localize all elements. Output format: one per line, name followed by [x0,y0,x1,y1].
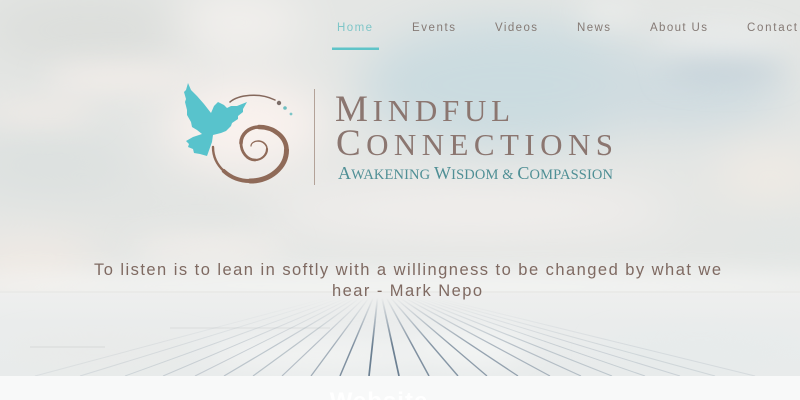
plank lines [35,301,755,376]
nav item: news: News [577,22,610,34]
wooden deck in perspective [0,284,800,376]
nav item: about us: About Us [650,22,707,34]
sky with clouds [0,0,800,298]
nav item: home, active [332,22,379,50]
nav item: home, active: Home [337,22,372,34]
icon: turquoise dove [184,83,247,156]
icon: brown spiral [213,127,286,181]
quote: hear - Mark Nepo [332,282,482,300]
logo wordmark: AWAKENING WISDOM & COMPASSION [338,163,614,183]
nav item: contact: Contact [747,22,798,34]
logo wordmark: CONNECTIONS [336,123,613,164]
quote: To listen is to lean in softly with a willingness to be changed by what we [94,261,721,279]
logo wordmark [335,89,614,183]
footer band [0,376,800,400]
nav item: events: Events [412,22,455,34]
logo [184,83,614,185]
navigation menu [332,22,798,50]
icon: arc and dots [230,95,292,115]
logo wordmark: MINDFUL [335,89,510,130]
logo divider [314,89,315,185]
nav item: videos: Videos [495,22,537,34]
quote [94,261,721,300]
